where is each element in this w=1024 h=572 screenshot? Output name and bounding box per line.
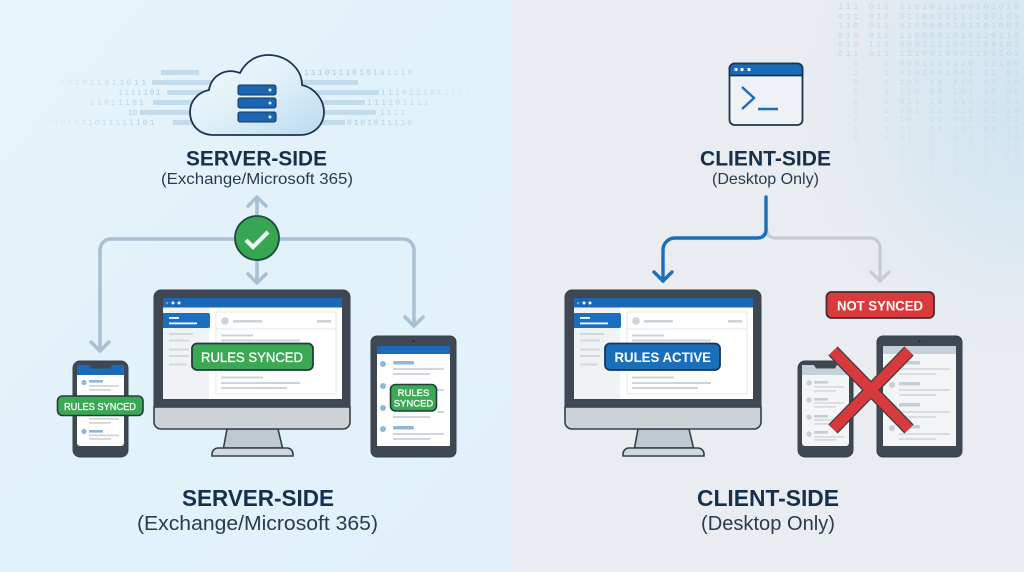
icon: terminal window bbox=[730, 64, 802, 125]
binary data stream top right: 1 1 0001110110 11100 bbox=[838, 59, 1022, 69]
binary data stream top right: 111 011 1101011100101010 bbox=[838, 2, 1022, 12]
subheading: desktop only top: (Desktop Only) bbox=[712, 171, 819, 188]
binary data stream behind cloud: 111101111 bbox=[367, 99, 431, 108]
binary data stream top right: 0 0 0 1 0 00 bbox=[838, 153, 1022, 163]
subheading: exchange bottom: (Exchange/Microsoft 365) bbox=[137, 513, 378, 535]
heading: server-side top: SERVER-SIDE bbox=[186, 148, 327, 170]
icon: green check bbox=[235, 216, 279, 260]
binary data stream top right: 0 0 011 10 110 01 01 bbox=[838, 97, 1022, 107]
binary data stream top right: 1 1 0101001001 11 01 bbox=[838, 68, 1022, 78]
badge: rules synced desktop: RULES SYNCED bbox=[201, 349, 303, 365]
badge: rules synced tablet: SYNCED bbox=[394, 398, 433, 410]
badge: not synced bbox=[826, 292, 934, 318]
tablet: not synced bbox=[877, 336, 962, 457]
binary data stream behind cloud: 1110111010101110 bbox=[304, 69, 414, 78]
badge: rules synced desktop bbox=[192, 344, 313, 370]
binary data stream top right: 0 1 110 00 101 10 00 bbox=[838, 87, 1022, 97]
binary data stream top right: 1 1 11 11 111 00 11 bbox=[838, 125, 1022, 135]
heading: client-side top: CLIENT-SIDE bbox=[700, 148, 831, 170]
binary data stream behind cloud: 1111 bbox=[380, 109, 407, 118]
binary data stream top right: 011 010 0110011111100100 bbox=[838, 12, 1022, 22]
desktop monitor: rules synced bbox=[154, 290, 350, 456]
binary data stream behind cloud: 0101011110 bbox=[347, 119, 414, 128]
tablet: rules synced bbox=[371, 336, 456, 457]
branch arrow blue: active path bbox=[654, 197, 766, 281]
binary data stream top right: 0 1 0 1 0 01 bbox=[838, 171, 1022, 181]
binary data stream behind cloud: 11011101 bbox=[90, 99, 146, 108]
badge: rules active: RULES ACTIVE bbox=[614, 349, 711, 365]
phone: rules synced bbox=[58, 361, 143, 457]
panel: client-side background bbox=[512, 0, 1024, 572]
binary data stream top right: 1 0 0 1 1 10 bbox=[838, 143, 1022, 153]
badge: rules synced phone: RULES SYNCED bbox=[64, 402, 136, 413]
phone: not synced bbox=[798, 361, 853, 457]
binary data stream behind cloud bbox=[40, 69, 472, 128]
badge: rules active bbox=[605, 344, 720, 370]
subheading: exchange top: (Exchange/Microsoft 365) bbox=[161, 171, 353, 188]
icon: red cross bbox=[833, 351, 909, 429]
binary data stream top right: 0 0 01 1 0 1 11 10 bbox=[838, 134, 1022, 144]
binary data stream top right: 1 1 001 11 010 01 10 bbox=[838, 106, 1022, 116]
binary data stream top right: 010 011 1100001010110110 bbox=[838, 31, 1022, 41]
binary data stream behind cloud: 10 bbox=[128, 109, 138, 118]
heading: client-side bottom: CLIENT-SIDE bbox=[697, 485, 839, 511]
binary data stream top right: 010 110 0001111001100101 bbox=[838, 40, 1022, 50]
binary data stream top right: 110 011 0100000101101001 bbox=[838, 21, 1022, 31]
heading: server-side bottom: SERVER-SIDE bbox=[182, 485, 334, 511]
badge: rules synced tablet: RULES bbox=[398, 388, 429, 399]
icon: cloud with server stack bbox=[190, 55, 324, 135]
sync arrows: server to devices bbox=[91, 197, 423, 351]
binary data stream behind cloud: 1111101 bbox=[118, 89, 162, 98]
binary data stream behind cloud: 10101011011111101 bbox=[40, 119, 156, 128]
binary data stream top right: 011 011 1110010001100101 bbox=[838, 49, 1022, 59]
binary data stream top right: 0 0 100 10 110 00 10 bbox=[838, 78, 1022, 88]
badge: rules synced tablet bbox=[390, 384, 436, 411]
binary data stream top right: 1 1 1 1 1 11 bbox=[838, 162, 1022, 172]
desktop monitor: rules active bbox=[565, 290, 761, 456]
subheading: desktop only bottom: (Desktop Only) bbox=[701, 513, 835, 535]
badge: not synced: NOT SYNCED bbox=[837, 298, 923, 314]
binary data stream top right bbox=[838, 2, 1022, 181]
binary data stream top right: 0 1 10 01 001 10 01 bbox=[838, 115, 1022, 125]
binary data stream behind cloud: 101011011011 bbox=[60, 79, 149, 88]
panel: server-side background bbox=[0, 0, 512, 572]
branch arrow grey: not synced path bbox=[767, 230, 889, 281]
binary data stream behind cloud: 1110111011111 bbox=[381, 89, 472, 98]
